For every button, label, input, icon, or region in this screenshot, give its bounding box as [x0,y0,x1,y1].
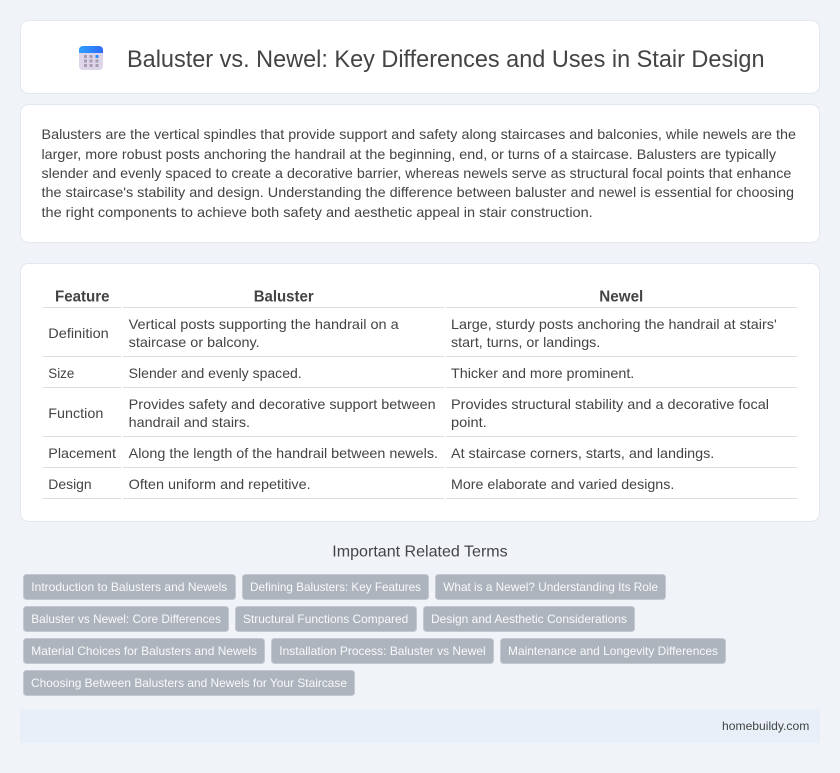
row: design: Design [48,476,92,492]
intro paragraph: Balusters are the vertical spindles that provide support and safety along staircases and balconies, while newels are the [42,126,796,142]
tag [424,606,634,632]
row: definition: staircase or balcony. [129,334,260,350]
row: function: Function [48,405,103,421]
row: placement: Along the length of the handrail between newels. [129,445,438,461]
tag [24,574,236,600]
row: function: point. [451,414,487,430]
row: function: Provides safety and decorative support between [129,396,436,412]
tag [24,606,228,632]
intro paragraph: slender and evenly spaced to create a decorative barrier, whereas newels serve as structural focal points that enhance [42,165,792,181]
tag: Choosing Between Balusters and Newels for Your Staircase [31,676,347,690]
intro paragraph: larger, more robust posts anchoring the handrail at the beginning, end, or turns of a staircase. Balusters are typically [42,146,776,162]
tag: Introduction to Balusters and Newels [31,580,227,594]
row: design: Often uniform and repetitive. [129,476,311,492]
row: definition [48,316,777,350]
row: placement [48,445,714,461]
tag: Maintenance and Longevity Differences [508,644,718,658]
tag: What is a Newel? Understanding Its Role [443,580,658,594]
related terms tags [24,574,726,696]
table header row: Baluster [254,288,314,306]
row: design [48,476,674,492]
row: function [48,396,769,430]
tag [436,574,666,600]
tag: Material Choices for Balusters and Newels [31,644,257,658]
row: size: Slender and evenly spaced. [129,365,302,381]
heading: related terms: Important Related Terms [332,544,508,560]
intro paragraph: the staircase's stability and design. Understanding the difference between baluster and newel is essential for choosing [42,184,794,200]
tag: Installation Process: Baluster vs Newel [279,644,486,658]
row: size: Thicker and more prominent. [451,365,634,381]
tag: Defining Balusters: Key Features [250,580,421,594]
title: Baluster vs. Newel: Key Differences and Uses in Stair Design [127,46,764,73]
footer source text: homebuildy.com [722,719,809,733]
row: definition: Definition [48,325,109,341]
tag [500,638,726,664]
row: size: Size [48,365,75,381]
table header row: Feature [55,288,110,306]
icon: calendar [79,46,103,70]
row: definition: start, turns, or landings. [451,334,600,350]
footer [20,709,820,743]
row: definition: Vertical posts supporting the handrail on a [129,316,399,332]
row: function: Provides structural stability and a decorative focal [451,396,769,412]
row: function: handrail and stairs. [129,414,250,430]
intro paragraph [42,126,796,220]
row: definition: Large, sturdy posts anchoring the handrail at stairs' [451,316,777,332]
panel: introduction [20,104,820,242]
tag: Structural Functions Compared [243,612,408,626]
tag [24,670,354,696]
row: placement: At staircase corners, starts, and landings. [451,445,714,461]
panel: header [20,20,820,94]
row: placement: Placement [48,445,116,461]
tag [242,574,428,600]
tag [272,638,494,664]
table header row: Newel [599,288,643,306]
tag [24,638,264,664]
tag: Baluster vs Newel: Core Differences [31,612,221,626]
tag [236,606,416,632]
tag: Design and Aesthetic Considerations [431,612,627,626]
row: size [48,365,634,381]
panel: comparison table [20,264,820,522]
intro paragraph: the right components to achieve both safety and aesthetic appeal in stair construction. [42,204,593,220]
row: design: More elaborate and varied designs. [451,476,674,492]
table header row [55,288,643,306]
